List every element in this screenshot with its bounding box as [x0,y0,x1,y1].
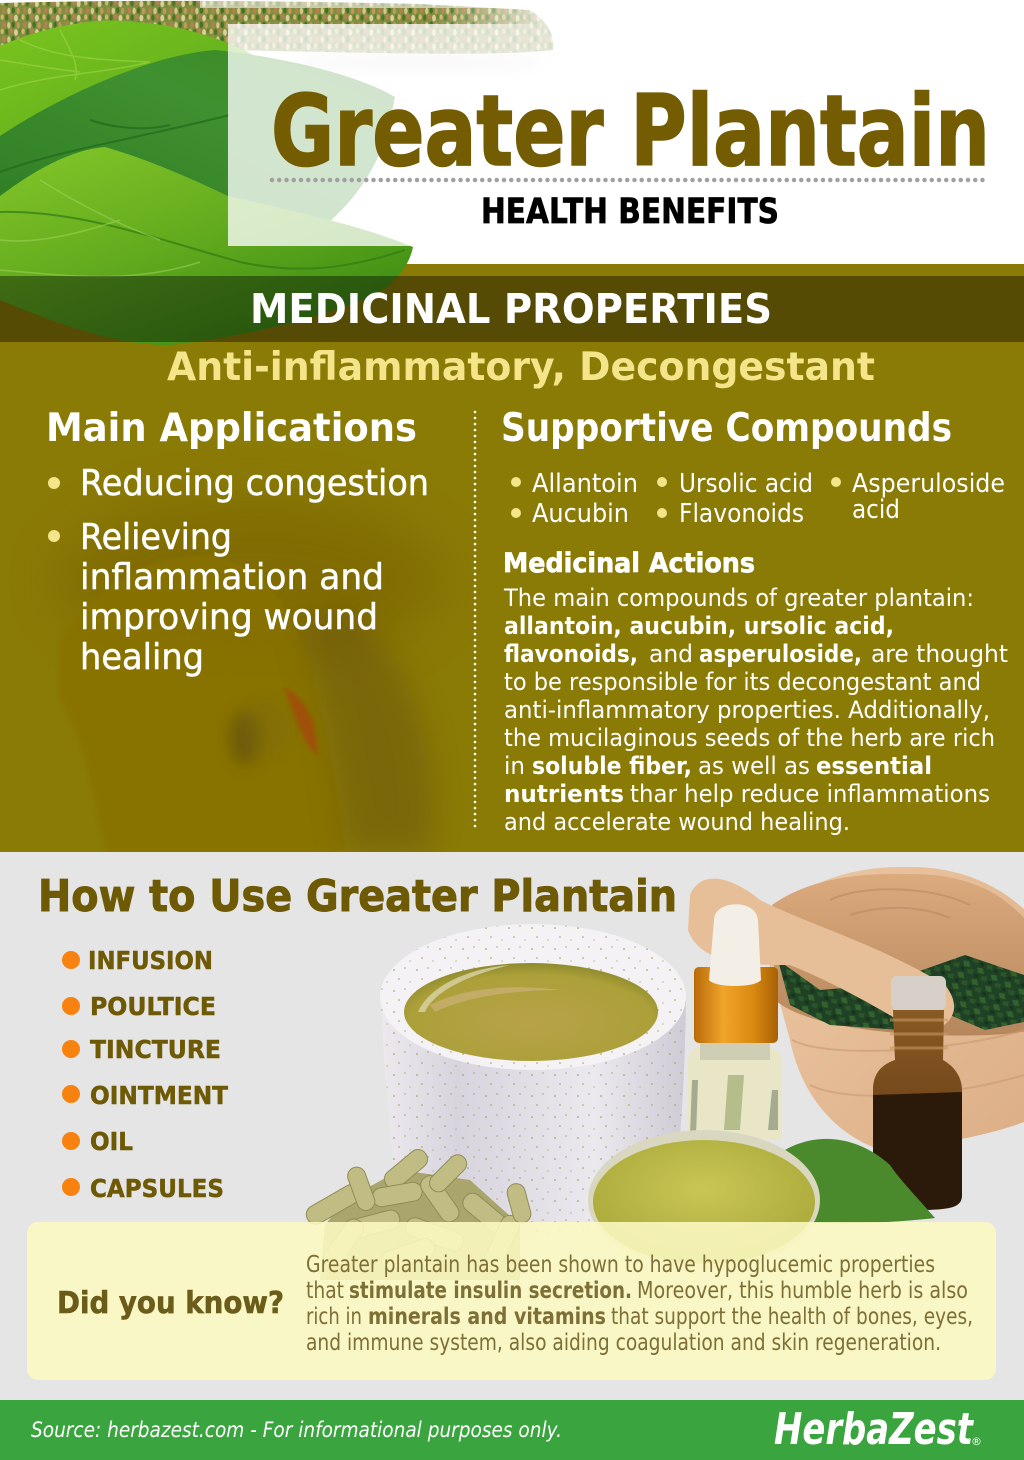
heading: Supportive Compounds [501,406,952,451]
compound list [511,469,1005,529]
medicinal actions paragraph: and accelerate wound healing. [504,808,850,836]
medicinal actions paragraph: nutrients [504,780,624,808]
medicinal actions paragraph: are thought [871,640,1008,668]
photo: remedies still life [303,867,1024,1280]
translucent white title panel [228,24,600,246]
medicinal actions paragraph: allantoin, aucubin, ursolic acid, [504,612,894,640]
item: capsules: CAPSULES [90,1174,224,1203]
amber bottle [873,976,962,1210]
compound list: Flavonoids [679,499,804,529]
salve tin [588,1130,820,1270]
source note: Source: herbazest.com - For informational purposes only. [31,1418,562,1442]
compound list: Ursolic acid [679,469,813,499]
properties subtitle: Anti-inflammatory, Decongestant [167,345,875,390]
medicinal actions paragraph: to be responsible for its decongestant and [504,668,981,696]
application 2 [80,517,384,678]
medicinal actions paragraph: as well as [698,752,810,780]
registered mark: ® [971,1435,982,1448]
item: oil [62,1127,133,1156]
heading band: medicinal properties [0,276,1024,342]
compound list: Allantoin [532,469,638,499]
bullet [48,530,60,542]
medicinal actions heading: Medicinal Actions [503,548,755,579]
item: tincture: TINCTURE [90,1035,221,1064]
bullet [48,477,60,489]
callout: did you know [27,1222,996,1380]
plantain seed spike [0,0,560,70]
panel: how to use background [0,852,1024,1400]
callout text: stimulate insulin secretion. [349,1278,632,1304]
panel: medicinal properties background [0,264,1024,852]
green leaf [785,1139,935,1223]
medicinal actions paragraph: thar help reduce inflammations [630,780,990,808]
application 2: improving wound [80,597,378,638]
arm photo: wound tint [60,500,440,852]
medicinal actions paragraph: in [504,752,525,780]
callout text [306,1252,973,1356]
list: forms of use [62,946,228,1203]
callout text: Moreover, this humble herb is also [637,1278,968,1304]
application 1: Reducing congestion [80,463,429,504]
compound list: acid [852,495,900,525]
item: poultice: POULTICE [90,992,216,1021]
callout text: that [306,1278,344,1304]
panel: supportive compounds [501,406,1008,836]
compound list: Aucubin [532,499,629,529]
leaf: top bright [0,20,262,150]
medicinal actions paragraph: anti-inflammatory properties. Additionally, [504,696,990,724]
medicinal actions paragraph: essential [816,752,932,780]
panel: main applications [46,406,429,678]
application 2: Relieving [80,517,232,558]
callout heading: Did you know? [57,1286,284,1321]
white tea cup [380,924,686,1240]
medicinal actions paragraph: and [649,640,693,668]
capsules [303,1146,533,1280]
application 2: inflammation and [80,557,384,598]
leaf: large front [0,147,413,345]
item: ointment: OINTMENT [90,1081,228,1110]
callout text: minerals and vitamins [368,1304,606,1330]
medicinal actions paragraph: flavonoids, [504,640,638,668]
medicinal actions paragraph [503,584,1008,836]
heading text: MEDICINAL PROPERTIES [250,285,772,333]
footer [0,1400,1024,1460]
mortar and herbs [688,867,1024,1148]
subtitle: HEALTH BENEFITS [481,192,779,232]
medicinal actions paragraph: asperuloside, [699,640,862,668]
medicinal actions paragraph: soluble fiber, [532,752,692,780]
heading: how to use: How to Use Greater Plantain [38,871,677,922]
heading: Main Applications [46,406,417,451]
application 2: healing [80,637,204,678]
green plantain leaves [0,20,413,345]
dotted divider [272,178,989,182]
medicinal actions paragraph: The main compounds of greater plantain: [503,584,974,612]
dropper bottle [688,904,782,1140]
callout text: rich in [306,1304,362,1330]
leaf: dark middle [0,50,395,225]
item: infusion: INFUSION [88,946,213,975]
item: oil: OIL [90,1127,133,1156]
medicinal actions paragraph: the mucilaginous seeds of the herb are rich [504,724,995,752]
compound list: Asperuloside [852,469,1005,499]
tea [404,963,658,1061]
